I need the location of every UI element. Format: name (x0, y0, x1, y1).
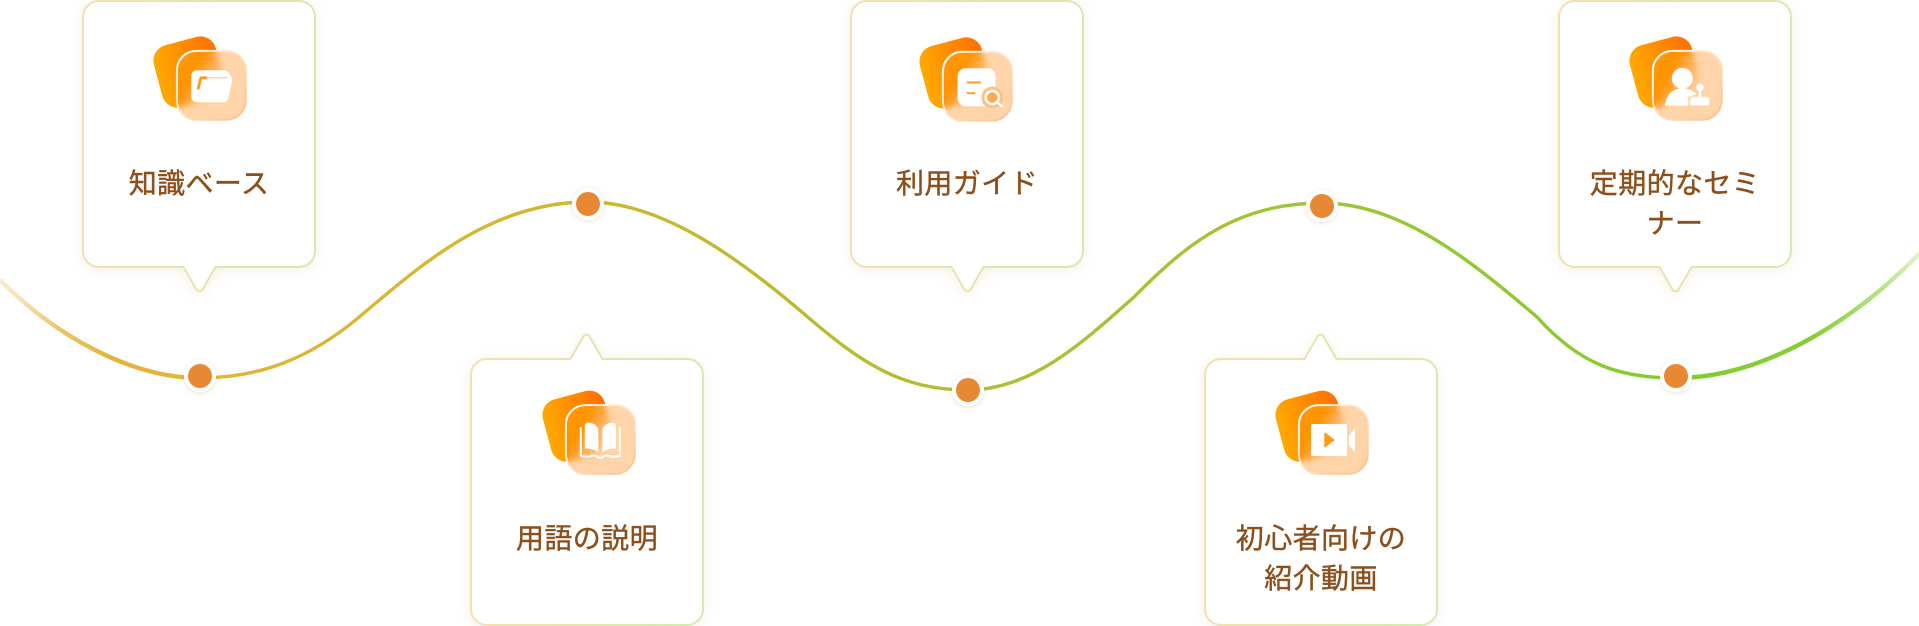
card outline (1559, 1, 1791, 291)
card outline (471, 335, 703, 625)
panel: regular seminars (1559, 1, 1791, 291)
icon: seminar speaker (1626, 33, 1722, 120)
icon: video camera (1272, 387, 1368, 474)
label: 定期的なセミ (1590, 168, 1760, 199)
timeline curve (1, 202, 1919, 390)
panel: glossary (471, 335, 703, 625)
card outline (851, 1, 1083, 291)
timeline dot 5 (1660, 360, 1692, 392)
panel: usage guide (851, 1, 1083, 291)
label line 2: ナー (1647, 208, 1703, 239)
icon: document search (916, 34, 1012, 121)
label: 初心者向けの (1236, 523, 1406, 554)
label line 2: 紹介動画 (1264, 563, 1378, 594)
icon: book (539, 387, 635, 474)
timeline dot 3 (952, 374, 984, 406)
card outline (83, 1, 315, 291)
label: 利用ガイド (896, 168, 1038, 199)
panel: knowledge base (83, 1, 315, 291)
label: 知識ベース (129, 168, 269, 199)
card outline (1205, 335, 1437, 625)
timeline dot 1 (184, 360, 216, 392)
timeline dot 4 (1306, 190, 1338, 222)
label: 用語の説明 (516, 523, 658, 554)
panel: intro videos (1205, 335, 1437, 625)
icon: folder (150, 33, 246, 120)
timeline dot 2 (572, 188, 604, 220)
